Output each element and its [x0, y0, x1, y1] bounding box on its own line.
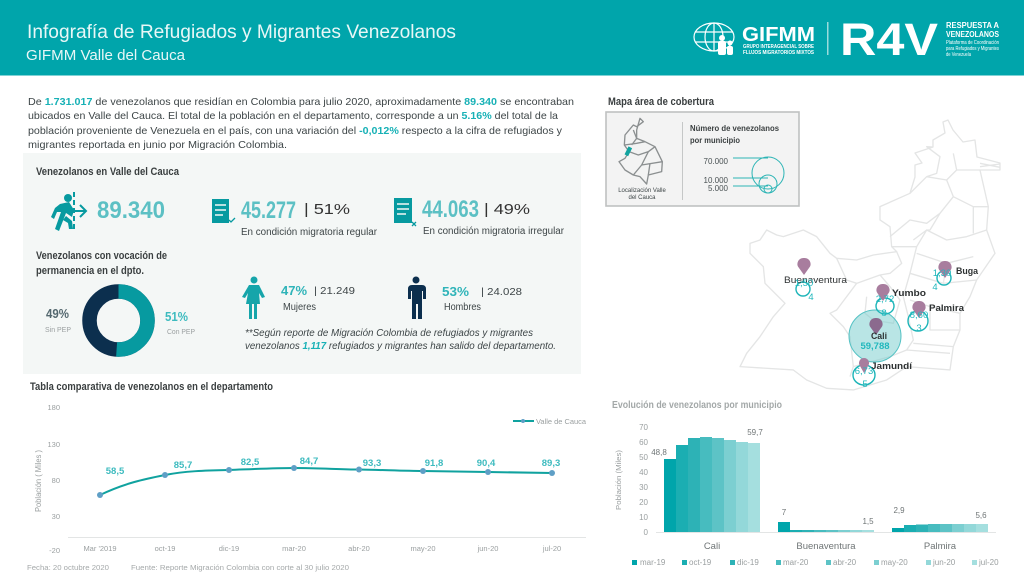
y axis labels: 80	[52, 476, 60, 485]
logo: R4V: VENEZOLANOS	[946, 30, 1000, 39]
stat: hombres: 53%	[442, 284, 469, 299]
bars: Palmira	[892, 524, 988, 532]
stat: mujeres: Mujeres	[283, 302, 316, 313]
logo: R4V	[840, 14, 1000, 65]
stat: irregular	[422, 196, 565, 237]
legend	[632, 558, 999, 567]
bubbles: municipios	[796, 271, 951, 385]
y axis labels: 180	[47, 403, 60, 412]
category labels: jul-20	[542, 544, 561, 553]
value labels	[106, 456, 560, 477]
legend: jul-20	[978, 558, 999, 567]
icon: woman	[242, 276, 265, 319]
bar value labels: 7	[782, 508, 787, 517]
category labels: may-20	[410, 544, 436, 553]
municipality values: 59,788	[860, 341, 890, 352]
value labels: 84,7	[300, 456, 318, 467]
legend: dic-19	[737, 558, 759, 567]
logo: GIFMM: FLUJOS MIGRATORIOS MIXTOS	[743, 50, 815, 56]
category labels: oct-19	[155, 544, 175, 553]
label: con PEP: Con PEP	[167, 327, 195, 336]
label: con PEP	[165, 309, 195, 336]
municipality values: 5	[862, 379, 868, 390]
y axis labels: -20	[49, 546, 60, 555]
municipality values: 8,60	[910, 310, 928, 321]
panel: Venezolanos en Valle del Cauca	[23, 153, 581, 374]
stat: regular: En condición migratoria regular	[241, 227, 378, 238]
y axis: 70	[639, 423, 649, 432]
donut chart: PEP	[90, 292, 148, 350]
label: localización	[618, 188, 666, 201]
category labels: abr-20	[348, 544, 370, 553]
municipality values	[795, 268, 951, 390]
value labels: 85,7	[174, 460, 192, 471]
municipality values: 8	[881, 308, 887, 319]
intro paragraph: ubicados en Valle del Cauca. El total de la población en el departamento, corresponde a un 5.16% del total de la	[28, 110, 558, 122]
municipal boundaries	[740, 120, 1000, 390]
label: sin PEP: Sin PEP	[45, 325, 71, 334]
panel: map legend: 5.000	[708, 184, 729, 193]
logo: GIFMM	[694, 23, 815, 56]
stat: hombres: | 24.028	[481, 286, 522, 298]
group labels: Cali	[704, 541, 720, 552]
label: sin PEP	[45, 306, 71, 334]
y axis: 40	[639, 468, 649, 477]
label: localización: del Cauca	[628, 195, 656, 201]
municipality labels	[784, 266, 979, 372]
heading: Mapa área de cobertura: Mapa área de cobertura	[608, 96, 715, 108]
panel: map legend	[606, 112, 799, 206]
category labels: Mar '2019	[83, 544, 117, 553]
category labels: mar-20	[282, 544, 306, 553]
source note	[27, 563, 349, 572]
legend title: por municipio	[690, 135, 740, 145]
municipality labels: Cali	[871, 331, 887, 342]
y axis: 60	[639, 438, 649, 447]
legend: mar-19	[640, 558, 666, 567]
value labels: 89,3	[542, 458, 560, 469]
legend: may-20	[881, 558, 908, 567]
category labels	[83, 544, 561, 553]
y axis title: Población (Miles)	[614, 449, 623, 510]
group labels: Buenaventura	[796, 541, 856, 552]
stat: regular: | 51%	[304, 201, 350, 218]
heading: vocación de permanencia	[36, 250, 167, 277]
bar value labels: 5,6	[975, 511, 987, 520]
panel: map legend: 10.000	[704, 176, 729, 185]
label: con PEP: 51%	[165, 309, 188, 324]
legend	[513, 417, 587, 426]
value labels: 91,8	[425, 458, 443, 469]
subtitle: GIFMM Valle del Cauca	[26, 47, 186, 64]
heading: vocación de permanencia: permanencia en el dpto.	[36, 265, 144, 277]
logo: R4V: de Venezuela	[946, 52, 971, 58]
municipality values: 1,50	[795, 278, 813, 289]
bars: Cali	[664, 437, 760, 532]
note: **Según reporte de Migración Colombia de refugiados y migrantes	[245, 328, 533, 339]
municipality values: 1,30	[933, 268, 951, 279]
panel: map legend: 70.000	[704, 157, 729, 166]
logo: R4V: R4V	[840, 14, 938, 65]
heading: Tabla comparativa: Tabla comparativa de venezolanos en el departamento	[30, 381, 273, 393]
municipality labels: Buenaventura	[784, 275, 848, 286]
stat: irregular: | 49%	[484, 201, 530, 218]
bar chart	[614, 423, 999, 567]
legend: oct-19	[689, 558, 712, 567]
note: venezolanos 1,117 refugiados y migrantes han salido del departamento.	[245, 341, 556, 352]
stat: regular	[241, 197, 378, 238]
heading: vocación de permanencia: Venezolanos con vocación de	[36, 250, 167, 262]
municipality labels: Palmira	[929, 303, 965, 314]
note	[245, 328, 556, 352]
stat: regular: 45.277	[241, 197, 296, 224]
municipality values: 6,73	[855, 366, 873, 377]
icon: document regular	[212, 199, 235, 223]
y axis title: Población ( Miles )	[34, 450, 43, 512]
logo: GIFMM: GRUPO INTERAGENCIAL SOBRE	[743, 44, 815, 50]
legend: Valle de Cauca	[536, 417, 587, 426]
legend: abr-20	[833, 558, 857, 567]
y axis labels: 130	[47, 440, 60, 449]
y axis labels: 30	[52, 512, 60, 521]
y axis: 10	[639, 513, 649, 522]
stat: mujeres: 47%	[281, 283, 307, 298]
pins	[797, 258, 952, 373]
title: Infografía de Refugiados y Migrantes Venezolanos	[27, 21, 456, 43]
bar value labels	[651, 428, 987, 526]
municipality labels: Yumbo	[892, 288, 926, 299]
bar value labels: 1,5	[862, 517, 874, 526]
stat: hombres	[442, 284, 522, 313]
y axis: 20	[639, 498, 649, 507]
header band	[0, 0, 1024, 76]
heading: Evolución por municipio: Evolución de venezolanos por municipio	[612, 399, 782, 411]
municipality values: 2,72	[876, 294, 894, 305]
intro paragraph	[28, 96, 574, 151]
category labels: dic-19	[219, 544, 239, 553]
stat: mujeres	[281, 283, 355, 313]
icon: man	[408, 276, 426, 319]
icon: person crossing border	[51, 192, 86, 231]
stat: total: 89.340	[97, 197, 165, 224]
intro paragraph: De 1.731.017 de venezolanos que residían en Colombia para julio 2020, aproximadamente 89.340 se encontraban	[28, 96, 574, 108]
value labels: 58,5	[106, 466, 125, 477]
logo: R4V: para Refugiados y Migrantes	[946, 46, 999, 52]
bar value labels: 48,8	[651, 448, 667, 457]
y axis	[639, 423, 649, 537]
group labels: Palmira	[924, 541, 957, 552]
legend: mar-20	[783, 558, 809, 567]
logo: R4V: Plataforma de Coordinación	[946, 40, 999, 46]
municipality values: 3	[916, 323, 922, 334]
markers	[97, 465, 555, 498]
legend title: Número de venezolanos	[690, 123, 779, 133]
intro paragraph: población proveniente de Venezuela en el país, con una variación del -0,012% respecto a la cifra de refugiados y	[28, 125, 563, 137]
municipality labels: Buga	[956, 266, 979, 277]
stat: irregular: 44.063	[422, 196, 479, 223]
intro paragraph: migrantes reportada en junio por Migración Colombia.	[28, 139, 287, 151]
legend title	[690, 123, 779, 145]
stat: hombres: Hombres	[444, 302, 481, 313]
label: localización: Localización Valle	[618, 188, 666, 194]
source note: Fuente: Reporte Migración Colombia con corte al 30 julio 2020	[131, 563, 349, 572]
bar value labels: 59,7	[747, 428, 763, 437]
y axis labels	[47, 403, 60, 555]
municipality values: 4	[932, 282, 938, 293]
icon: document irregular	[394, 198, 416, 226]
line chart	[34, 403, 587, 555]
legend: jun-20	[932, 558, 956, 567]
bars: Buenaventura	[778, 522, 874, 532]
line	[100, 468, 552, 495]
heading: Venezolanos en Valle del Cauca: Venezolanos en Valle del Cauca	[36, 166, 180, 178]
municipality labels: Jamundí	[871, 361, 912, 372]
group labels	[704, 541, 957, 552]
stat: irregular: En condición migratoria irregular	[423, 226, 565, 237]
map: Valle del Cauca	[740, 120, 1000, 390]
y axis: 50	[639, 453, 649, 462]
logo: GIFMM: GIFMM	[742, 24, 815, 46]
label: sin PEP: 49%	[46, 306, 69, 321]
source note: Fecha: 20 octubre 2020	[27, 563, 109, 572]
bar value labels: 2,9	[893, 506, 905, 515]
logo: R4V: RESPUESTA A	[946, 21, 999, 30]
proportional circles	[733, 157, 784, 193]
municipality values: 4	[808, 292, 814, 303]
y axis: 30	[639, 483, 649, 492]
icon: Colombia map	[619, 118, 662, 184]
y axis: 0	[644, 528, 649, 537]
value labels: 82,5	[241, 457, 260, 468]
category labels: jun-20	[477, 544, 498, 553]
value labels: 93,3	[363, 458, 381, 469]
stat: mujeres: | 21.249	[314, 285, 355, 297]
value labels: 90,4	[477, 458, 496, 469]
bubble: Cali	[849, 310, 901, 362]
